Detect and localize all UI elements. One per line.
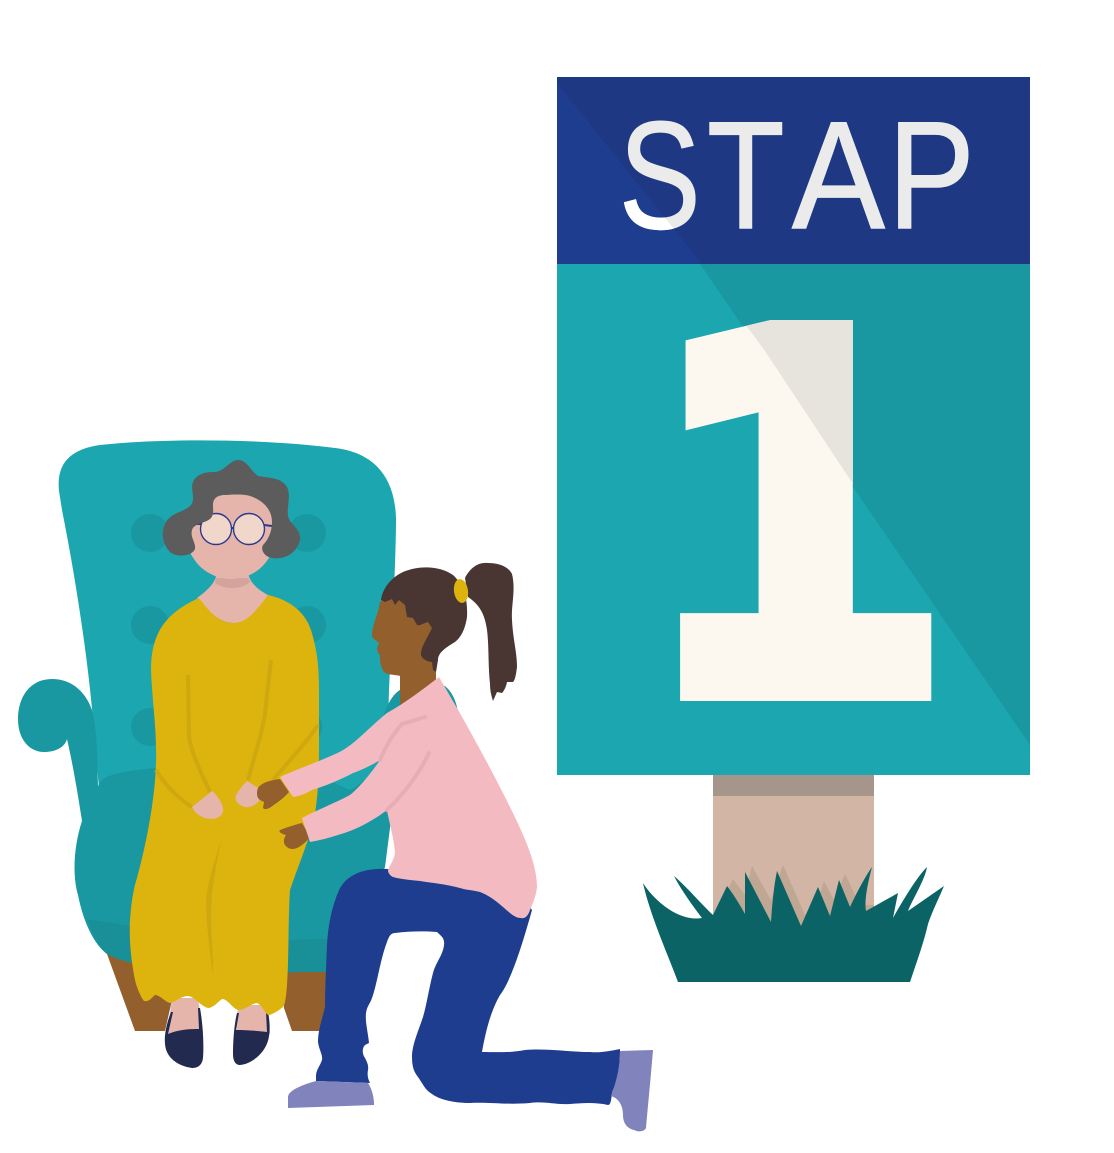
seat shadow strip xyxy=(87,919,345,973)
yellow dress xyxy=(130,595,319,1015)
big number 1: 1 xyxy=(648,236,942,803)
dress folds xyxy=(156,660,318,975)
chair back xyxy=(59,440,396,800)
front shoe xyxy=(288,1081,374,1108)
chair buttons xyxy=(131,514,326,746)
helper's hands xyxy=(257,779,310,849)
sign title: STAP xyxy=(624,120,968,230)
armchair xyxy=(18,440,458,1031)
sweater folds xyxy=(380,717,429,810)
ponytail xyxy=(465,563,517,701)
woman's hands xyxy=(192,781,260,819)
pink sweater xyxy=(280,677,537,918)
neck and face xyxy=(372,590,436,712)
sign title: STAP: S xyxy=(619,91,701,261)
sign title: STAP: S xyxy=(619,91,701,261)
big number 1 xyxy=(680,320,932,701)
big number 1: 1 xyxy=(648,236,942,803)
sign title: STAP: T xyxy=(707,90,785,261)
sign title: STAP: A xyxy=(792,90,885,260)
hair tie xyxy=(452,578,470,604)
neck xyxy=(197,570,270,623)
grass xyxy=(643,867,944,982)
right armrest scroll xyxy=(380,686,458,770)
face xyxy=(188,492,276,579)
hair xyxy=(381,567,467,672)
sign title: STAP: P xyxy=(888,90,975,261)
glasses xyxy=(193,514,272,544)
chair legs xyxy=(107,950,340,1031)
back shoe xyxy=(611,1050,653,1131)
sign post xyxy=(713,775,874,935)
feet and shoes xyxy=(165,998,270,1068)
hair xyxy=(163,460,300,558)
sign board xyxy=(557,77,1030,803)
left armrest scroll xyxy=(18,679,391,973)
jeans xyxy=(316,869,620,1105)
neck shadow xyxy=(215,578,250,588)
kneeling helper xyxy=(257,563,653,1131)
seated woman xyxy=(130,460,319,1068)
